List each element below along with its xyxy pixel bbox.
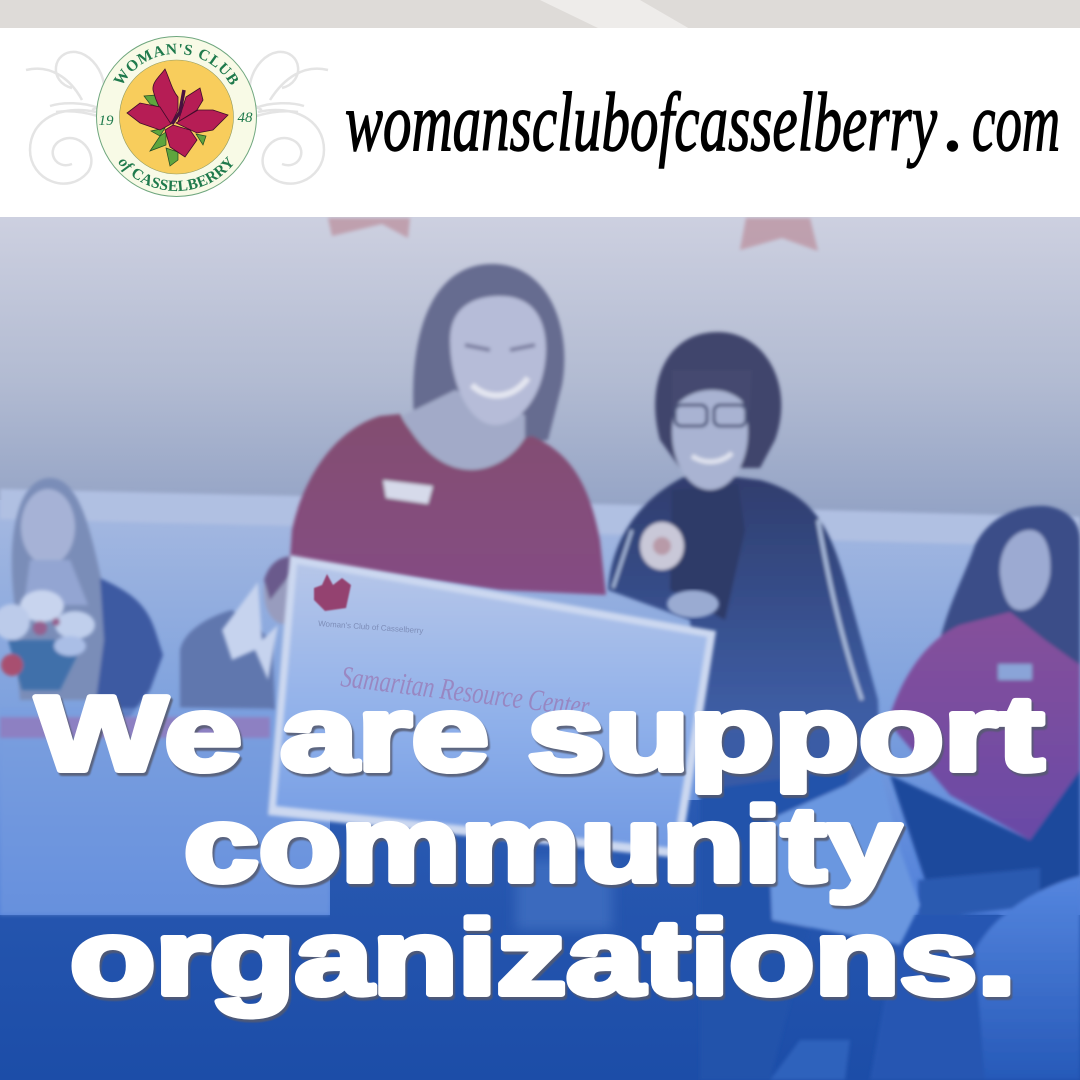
hibiscus flower <box>127 69 228 157</box>
check flower logo <box>314 574 351 611</box>
white banner <box>0 28 1080 217</box>
empty chair <box>180 610 275 710</box>
light trousers <box>768 770 920 945</box>
headline shadow: organizations. <box>72 902 1018 1020</box>
logo top text: WOMAN'S CLUB <box>113 44 238 84</box>
jacket lower <box>700 770 850 1080</box>
headline <box>36 675 1046 1020</box>
woman holding check <box>264 264 606 624</box>
logo yellow disc <box>120 60 234 174</box>
floor area <box>0 915 1080 1080</box>
headline text <box>36 675 1044 1017</box>
white lily <box>222 582 278 680</box>
check payee: Samaritan Resource Center <box>339 660 592 723</box>
wall stars <box>328 218 818 251</box>
flower bouquet <box>0 590 95 690</box>
hibiscus leaves <box>144 95 206 166</box>
website dot: . <box>944 76 965 169</box>
hand on check <box>667 590 719 618</box>
logo year right: 48 <box>238 110 253 126</box>
wall background <box>0 217 1080 557</box>
giant check <box>268 555 716 858</box>
hibiscus stamen <box>172 90 184 124</box>
photo panel: check presentation <box>0 217 1080 1080</box>
website address <box>345 76 1060 169</box>
wainscot rail <box>0 489 1080 547</box>
logo: Woman's Club of Casselberry <box>96 36 257 197</box>
table with cloth <box>0 708 330 915</box>
headline shadow <box>38 678 1046 1020</box>
check sender: Woman's Club of Casselberry <box>318 619 424 635</box>
woman with dark jacket <box>608 332 920 1080</box>
headline text: We are support <box>36 675 1044 793</box>
top photo strip <box>0 0 1080 29</box>
corsage <box>640 522 684 570</box>
logo bottom text: of CASSELBERRY <box>118 156 234 192</box>
lower wall <box>0 500 1080 915</box>
headline shadow: We are support <box>38 678 1046 796</box>
seated woman right <box>870 506 1080 1080</box>
headline text: community <box>184 786 901 904</box>
trousers under check <box>330 800 702 916</box>
logo year left: 19 <box>98 113 114 129</box>
logo outer ring <box>96 36 256 196</box>
sneaker <box>770 1040 850 1080</box>
headline shadow: community <box>186 789 903 907</box>
decorative swirls beside logo <box>26 52 328 184</box>
seated woman left <box>12 478 163 730</box>
light column under check <box>516 860 612 930</box>
headline text: organizations. <box>70 899 1016 1017</box>
